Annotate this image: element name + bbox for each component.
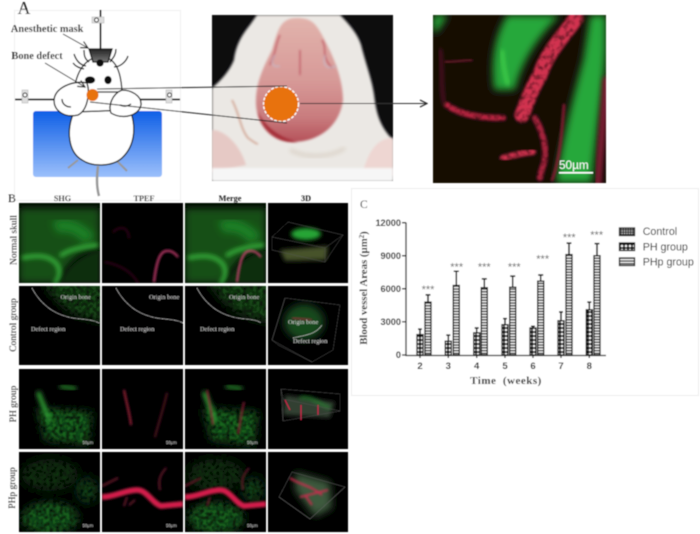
panel B row labels: PHp group: [8, 467, 18, 509]
image: PH TPEF: [102, 369, 183, 449]
image: control merge: [185, 280, 272, 365]
image: normal SHG: [19, 203, 100, 283]
scale bar: 50µm: [559, 158, 589, 172]
fur: [212, 15, 393, 181]
axes: [402, 222, 606, 358]
x tick labels: 7: [558, 361, 564, 372]
legend: [620, 226, 694, 268]
x tick labels: 6: [530, 361, 536, 372]
image: normal merge: [185, 203, 266, 283]
image: control merge: Origin bone: [229, 294, 259, 301]
panel B row labels: Control group: [9, 298, 19, 352]
significance stars: ***: [590, 229, 604, 241]
significance stars: ***: [422, 284, 435, 296]
image: PHp merge: 50µm: [247, 523, 258, 528]
significance stars: ***: [450, 261, 464, 273]
panel B column headings: Merge: [219, 194, 242, 203]
panel B row labels: Normal skull: [10, 215, 20, 265]
label: anesthetic mask: Anesthetic mask: [11, 24, 84, 35]
image: control merge: Defect region: [200, 326, 235, 333]
image: control 3D: Origin bone: [288, 319, 318, 326]
exposed skull: [256, 18, 343, 142]
image: PHp merge: [185, 452, 266, 534]
y axis title: 2: [358, 234, 366, 238]
image: PH merge: 50µm: [247, 440, 258, 445]
y tick labels: 3000: [381, 317, 401, 327]
image: control SHG: [19, 280, 106, 365]
legend: PH group: [643, 242, 688, 254]
image: normal TPEF: [102, 203, 183, 283]
image: normal 3D: [268, 203, 348, 283]
row: PH group: [19, 369, 348, 449]
blue heating pad: [33, 111, 162, 177]
y tick labels: [375, 218, 401, 360]
y tick labels: 12000: [375, 218, 401, 228]
x tick labels: 4: [474, 361, 480, 372]
panel B column headings: TPEF: [134, 194, 154, 203]
y axis title: Blood vessel Areas (µm: [358, 238, 370, 345]
x tick labels: 3: [446, 361, 451, 372]
legend: PHp group: [643, 256, 694, 268]
significance stars: ***: [536, 253, 550, 265]
PH group bars: [417, 310, 592, 355]
significance stars: ***: [563, 232, 576, 244]
row: control group: [19, 280, 348, 365]
y axis title: ): [358, 231, 370, 235]
image: PHp TPEF: 50µm: [166, 523, 177, 528]
image: PHp 3D: [268, 452, 348, 532]
image: PH TPEF: 50µm: [166, 440, 177, 445]
y tick labels: 9000: [381, 251, 401, 261]
panel A: surgical photo: [212, 15, 393, 181]
significance stars: ***: [478, 261, 491, 273]
image: control TPEF: Origin bone: [149, 294, 179, 301]
image: PH 3D: [268, 369, 348, 449]
scale label: 50µm: [82, 440, 94, 445]
panel A: mouse schematic: [11, 0, 180, 200]
image: control 3D: [268, 286, 348, 365]
PHp group bars: [425, 255, 600, 355]
image: PH SHG: [19, 369, 100, 449]
x tick labels: 2: [417, 361, 423, 372]
significance stars: [422, 229, 604, 296]
orange defect in photo: [264, 86, 298, 122]
panel B row labels: PH group: [9, 385, 19, 422]
icon: orange defect: [86, 89, 98, 101]
arrow to confocal image: [300, 102, 427, 104]
panel B column headings: 3D: [301, 194, 311, 203]
panel B column headings: [54, 194, 311, 203]
error bars: [418, 243, 600, 341]
x tick labels: 8: [587, 361, 592, 372]
panel C: bar chart: [352, 188, 698, 396]
x tick labels: [417, 361, 592, 372]
legend: Control: [643, 226, 677, 238]
stereotaxic bars: [15, 10, 180, 103]
image: control 3D: Defect region: [293, 338, 328, 345]
panel letter C: C: [360, 199, 368, 211]
image: control SHG: Origin bone: [60, 294, 91, 301]
significance stars: ***: [508, 261, 521, 273]
panel B letter: B: [8, 191, 16, 205]
image: PHp SHG: 50µm: [82, 523, 94, 528]
label: bone defect: Bone defect: [12, 51, 63, 62]
image: PH merge: [185, 369, 266, 449]
image: control TPEF: [102, 286, 183, 365]
row: normal skull: [19, 203, 348, 283]
image: control SHG: Defect region: [31, 326, 66, 333]
panel B row labels: [8, 215, 20, 509]
y tick labels: 0: [396, 350, 401, 360]
panel A: confocal image: [433, 15, 606, 183]
y tick labels: 6000: [381, 284, 401, 294]
x tick labels: 5: [502, 361, 508, 372]
panel B column headings: SHG: [54, 194, 72, 203]
image: PHp SHG: [19, 452, 100, 534]
row: PHp group: [19, 452, 348, 534]
image: PHp TPEF: [102, 452, 183, 532]
callout arrows: [45, 34, 88, 87]
connector lines: [90, 86, 427, 123]
mouse drawing: [54, 49, 141, 196]
x axis title: Time (weeks): [470, 375, 542, 387]
image: control TPEF: Defect region: [120, 326, 155, 333]
